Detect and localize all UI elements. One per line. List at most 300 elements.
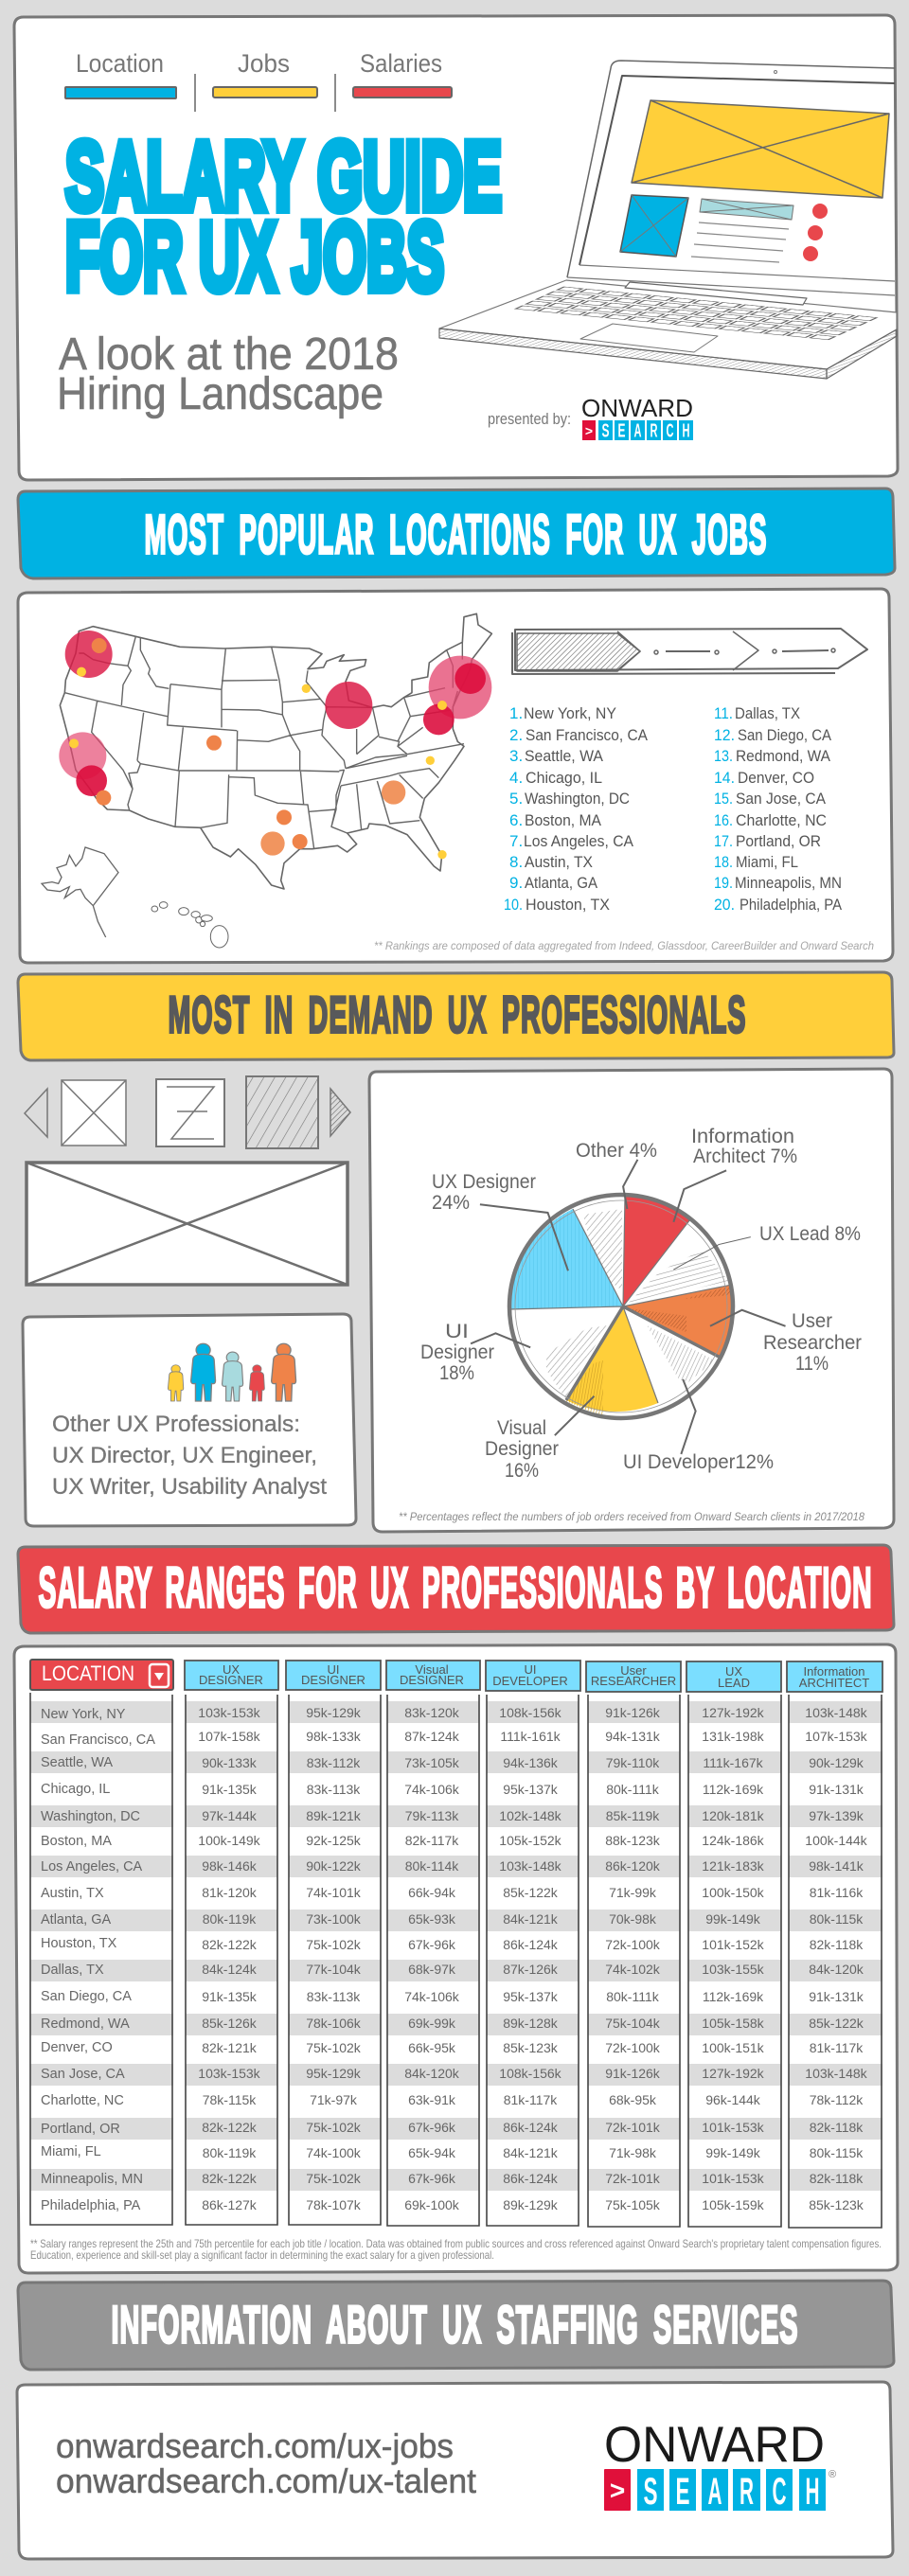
ranking names: Washington, DC [525, 790, 630, 808]
logo: onward search [604, 2417, 836, 2513]
table salary values: 66k-94k [408, 1885, 456, 1900]
table salary values: 101k-153k [702, 2120, 765, 2135]
table salary values: 98k-141k [809, 1858, 864, 1874]
table salary values: 91k-135k [202, 1782, 258, 1797]
ranking names: Redmond, WA [736, 747, 831, 765]
table salary values: 80k-115k [810, 1911, 864, 1927]
table salary values: 91k-135k [202, 1989, 258, 2004]
table location names: Houston, TX [41, 1936, 117, 1951]
legend: salaries: Salaries [360, 49, 442, 78]
header: job titles: DESIGNER [301, 1673, 365, 1687]
table salary values [198, 1705, 868, 2212]
wireframe: large image placeholder [27, 1163, 348, 1285]
table salary values: 83k-120k [404, 1705, 460, 1720]
table salary values: 79k-113k [405, 1808, 459, 1823]
table salary values: 72k-101k [605, 2171, 661, 2186]
table salary values: 91k-126k [605, 2066, 661, 2081]
table salary values: 67k-96k [408, 2120, 456, 2135]
panel: map and rankings [18, 589, 893, 963]
table salary values: 68k-95k [609, 2092, 657, 2107]
table salary values: 98k-133k [306, 1729, 362, 1744]
table salary values: 91k-126k [605, 1705, 661, 1720]
ranking numbers: 1. [509, 704, 523, 722]
pie labels: Information [691, 1126, 794, 1147]
wireframe box: x [62, 1080, 126, 1146]
table salary values: 80k-111k [606, 1989, 660, 2004]
ranking names: New York, NY [524, 704, 616, 722]
table salary values: 89k-129k [503, 2197, 559, 2212]
table salary values: 100k-144k [805, 1833, 868, 1848]
logo: onward search: > [610, 2476, 625, 2505]
table salary values: 86k-124k [503, 1937, 559, 1952]
table salary values: 65k-94k [408, 2145, 456, 2160]
table salary values: 91k-131k [809, 1782, 864, 1797]
ranking numbers: 9. [509, 874, 523, 892]
header: job titles: DESIGNER [400, 1673, 464, 1687]
table salary values: 102k-148k [499, 1808, 562, 1823]
map: hawaii [152, 902, 228, 948]
ranking numbers: 3. [509, 747, 523, 765]
screen: yellow block [632, 100, 889, 198]
logo: onward search: A [708, 2471, 722, 2513]
table salary values: 85k-123k [809, 2197, 864, 2212]
table salary values: 82k-122k [202, 2120, 258, 2135]
table salary values: 65k-93k [408, 1911, 456, 1927]
ranking names: Minneapolis, MN [735, 874, 842, 892]
table salary values: 74k-106k [404, 1782, 460, 1797]
header: job titles: ARCHITECT [799, 1676, 869, 1690]
table salary values: 112k-169k [703, 1989, 764, 2004]
table salary values: 84k-124k [202, 1962, 258, 1977]
pie labels [420, 1126, 862, 1482]
section band: staffing services [18, 2281, 894, 2370]
header: job titles: LEAD [718, 1676, 750, 1690]
table salary values: 107k-153k [805, 1729, 868, 1744]
table location names: Seattle, WA [41, 1755, 113, 1770]
table salary values: 78k-107k [306, 2197, 362, 2212]
table salary values: 80k-111k [606, 1782, 660, 1797]
table salary values: 101k-153k [702, 2171, 765, 2186]
table column outlines [30, 1693, 882, 2228]
text block: UX Writer, Usability Analyst [52, 1474, 327, 1500]
ranking names: Los Angeles, CA [524, 832, 634, 850]
table location names: Boston, MA [41, 1834, 112, 1849]
slice: visual designer [566, 1306, 658, 1412]
map: markers [59, 631, 491, 859]
table salary values: 124k-186k [702, 1833, 765, 1848]
table salary values: 103k-148k [499, 1858, 562, 1874]
logo: onward search: H [805, 2471, 820, 2513]
table salary values: 83k-113k [307, 1989, 361, 2004]
table salary values: 103k-153k [198, 1705, 261, 1720]
logo: small: H [682, 420, 689, 441]
table salary values: 89k-128k [503, 2016, 559, 2031]
ranking names: Philadelphia, PA [740, 896, 843, 914]
pie footnote: ** Percentages reflect the numbers of job orders received from Onward Search clients in 2017/2018 [399, 1510, 864, 1523]
table salary values: 84k-121k [503, 2145, 559, 2160]
ranking numbers: 19. [714, 874, 733, 892]
legend: jobs [213, 49, 317, 98]
table salary values: 105k-152k [499, 1833, 562, 1848]
panel: salary table [14, 1644, 898, 2273]
table footnote [30, 2237, 882, 2262]
table salary values: 79k-110k [606, 1755, 660, 1770]
panel: hero [14, 15, 898, 480]
table salary values: 75k-102k [306, 1937, 362, 1952]
pie labels: 24% [432, 1192, 470, 1214]
table salary values: 80k-119k [203, 2145, 257, 2160]
table salary values: 75k-104k [605, 2016, 661, 2031]
table salary values: 74k-106k [404, 1989, 460, 2004]
table salary values: 95k-137k [503, 1782, 559, 1797]
table salary values: 78k-106k [306, 2016, 362, 2031]
table salary values: 92k-125k [306, 1833, 362, 1848]
table salary values: 71k-97k [310, 2092, 358, 2107]
table salary values: 85k-122k [503, 1885, 559, 1900]
table salary values: 75k-102k [306, 2171, 362, 2186]
table location names: Washington, DC [41, 1809, 140, 1824]
ranking numbers: 2. [509, 726, 523, 744]
slice dividers [509, 1196, 732, 1403]
ranking names: Atlanta, GA [525, 874, 598, 892]
table location names: San Jose, CA [41, 2067, 125, 2082]
table salary values: 111k-167k [703, 1755, 764, 1770]
header: job titles [185, 1661, 882, 1692]
ranking names: San Diego, CA [738, 726, 832, 744]
table salary values: 107k-158k [198, 1729, 261, 1744]
table salary values: 112k-169k [703, 1782, 764, 1797]
logo: onward search: E [676, 2471, 689, 2513]
table salary values: 98k-146k [202, 1858, 258, 1874]
pie chart [509, 1195, 733, 1418]
table salary values: 69k-100k [404, 2197, 460, 2212]
panel: links and logo [17, 2382, 893, 2559]
table salary values: 101k-152k [702, 1937, 765, 1952]
table salary values: 83k-113k [307, 1782, 361, 1797]
pie labels: Other 4% [576, 1140, 657, 1162]
table location names: Chicago, IL [41, 1782, 110, 1797]
icon: people [168, 1343, 296, 1401]
panel: other professionals [23, 1314, 356, 1526]
logo: onward search: R [740, 2471, 754, 2513]
table salary values: 82k-118k [810, 2120, 864, 2135]
ranking numbers: 7. [509, 832, 523, 850]
table location names: San Diego, CA [41, 1989, 132, 2004]
pie labels: UX Lead 8% [759, 1223, 861, 1245]
pie labels: UI [445, 1321, 469, 1342]
arrow: right [330, 1089, 350, 1136]
laptop base [439, 280, 897, 379]
table salary values: 99k-149k [705, 2145, 761, 2160]
pie labels: Architect 7% [693, 1146, 797, 1167]
table salary values: 90k-129k [809, 1755, 864, 1770]
table salary values: 105k-159k [702, 2197, 765, 2212]
table location names: New York, NY [41, 1707, 126, 1722]
table location names: San Francisco, CA [41, 1732, 155, 1748]
ranking numbers: 20. [714, 896, 735, 914]
table salary values: 80k-114k [405, 1858, 459, 1874]
logo: onward search: ONWARD [604, 2417, 825, 2473]
subtitle: Hiring Landscape [57, 369, 383, 419]
text block [52, 1412, 327, 1500]
table salary values: 103k-153k [198, 2066, 261, 2081]
table location names: Redmond, WA [41, 2016, 130, 2032]
logo: small [581, 394, 693, 441]
logo: small: S [602, 420, 610, 441]
ranking names: Boston, MA [525, 811, 602, 829]
table salary values: 73k-100k [306, 1911, 362, 1927]
table salary values: 84k-120k [404, 2066, 460, 2081]
screen: teal block [700, 199, 793, 220]
ranking numbers: 16. [714, 811, 733, 829]
table salary values: 72k-100k [605, 2040, 661, 2055]
ranking names: Denver, CO [738, 769, 814, 787]
map: united states [42, 613, 491, 948]
title: SALARY GUIDE [65, 122, 502, 230]
ranking numbers [504, 704, 735, 914]
table salary values: 103k-148k [805, 2066, 868, 2081]
leader lines [471, 1160, 786, 1454]
pie labels: 11% [795, 1353, 829, 1375]
table salary values: 85k-122k [809, 2016, 864, 2031]
logo: small: C [667, 420, 674, 441]
ranking numbers: 13. [714, 747, 733, 765]
title [65, 122, 502, 311]
header: location [30, 1660, 173, 1690]
table location names: Dallas, TX [41, 1963, 104, 1978]
table location names: Denver, CO [41, 2040, 113, 2055]
slice hatching [546, 1209, 729, 1398]
pie labels: 18% [439, 1362, 474, 1384]
table salary values: 67k-96k [408, 2171, 456, 2186]
ranking names [524, 704, 843, 914]
header: job titles: UX [725, 1664, 742, 1679]
ranking names: Chicago, IL [526, 769, 602, 787]
ranking names: Houston, TX [526, 896, 610, 914]
header: location: LOCATION [42, 1661, 134, 1685]
table location names: Charlotte, NC [41, 2093, 124, 2108]
table salary values: 80k-119k [203, 1911, 257, 1927]
table location names: Miami, FL [41, 2144, 101, 2159]
pie labels: Designer [485, 1438, 559, 1460]
header: job titles: User [620, 1663, 647, 1678]
table salary values: 87k-126k [503, 1962, 559, 1977]
table salary values: 87k-124k [404, 1729, 460, 1744]
ranking numbers: 17. [714, 832, 733, 850]
table salary values: 63k-91k [408, 2092, 456, 2107]
table salary values: 67k-96k [408, 1937, 456, 1952]
ranking numbers: 5. [509, 790, 523, 808]
ranking names: San Jose, CA [736, 790, 827, 808]
ranking numbers: 14. [714, 769, 735, 787]
wireframe box: hatched [246, 1076, 318, 1148]
table salary values: 95k-129k [306, 2066, 362, 2081]
ranking names: San Francisco, CA [526, 726, 649, 744]
ranking names: Charlotte, NC [736, 811, 827, 829]
ranking numbers: 12. [714, 726, 735, 744]
table salary values: 111k-161k [500, 1729, 561, 1744]
subtitle: A look at the 2018 [59, 329, 399, 380]
ranking numbers: 18. [714, 853, 733, 871]
ranking numbers: 10. [504, 896, 523, 914]
table salary values: 85k-119k [606, 1808, 660, 1823]
table salary values: 72k-101k [605, 2120, 661, 2135]
table salary values: 94k-136k [503, 1755, 559, 1770]
wireframe box: z [156, 1079, 224, 1146]
logo: small: A [634, 420, 642, 441]
table location names: Philadelphia, PA [41, 2198, 141, 2213]
table salary values: 89k-121k [306, 1808, 362, 1823]
legend: salaries [353, 49, 452, 98]
text block: Other UX Professionals: [52, 1412, 300, 1437]
wireframe carousel [25, 1076, 350, 1148]
ranking numbers: 4. [509, 769, 523, 787]
section band: locations [18, 489, 895, 578]
table salary values: 100k-149k [198, 1833, 261, 1848]
table salary values: 70k-98k [609, 1911, 657, 1927]
map footnote: ** Rankings are composed of data aggregated from Indeed, Glassdoor, CareerBuilder and Onward Search [374, 939, 874, 952]
table salary values: 69k-99k [408, 2016, 456, 2031]
table salary values: 121k-183k [702, 1858, 765, 1874]
table salary values: 81k-116k [810, 1885, 864, 1900]
header: job titles: RESEARCHER [591, 1674, 676, 1688]
table salary values: 81k-117k [810, 2040, 864, 2055]
legend: jobs: Jobs [238, 49, 290, 78]
table salary values: 83k-112k [307, 1755, 361, 1770]
slice: ux designer [509, 1209, 623, 1309]
table salary values: 74k-101k [306, 1885, 362, 1900]
ranking names: Seattle, WA [525, 747, 604, 765]
table salary values: 108k-156k [499, 2066, 562, 2081]
table salary values: 77k-104k [306, 1962, 362, 1977]
table salary values: 78k-115k [203, 2092, 257, 2107]
table salary values: 103k-148k [805, 1705, 868, 1720]
ranking names: Dallas, TX [735, 704, 800, 722]
table salary values: 131k-198k [702, 1729, 765, 1744]
legend: location [65, 49, 176, 98]
pie labels: Designer [420, 1341, 494, 1363]
table salary values: 105k-158k [702, 2016, 765, 2031]
table salary values: 86k-124k [503, 2120, 559, 2135]
table salary values: 82k-121k [202, 2040, 258, 2055]
table salary values: 84k-120k [809, 1962, 864, 1977]
ranking numbers: 11. [714, 704, 733, 722]
table salary values: 95k-137k [503, 1989, 559, 2004]
table salary values: 81k-117k [504, 2092, 558, 2107]
map: alaska [42, 847, 118, 937]
presented by: presented by: [488, 410, 571, 428]
table salary values: 97k-144k [202, 1808, 258, 1823]
header: job titles: UX [223, 1662, 240, 1677]
table salary values: 97k-139k [809, 1808, 864, 1823]
table salary values: 74k-100k [306, 2145, 362, 2160]
table salary values: 85k-123k [503, 2040, 559, 2055]
legend: location: Location [76, 49, 164, 78]
table location names: Atlanta, GA [41, 1912, 111, 1928]
pie labels: UI Developer12% [623, 1451, 774, 1473]
header: job titles: UI [525, 1662, 536, 1677]
links [56, 2426, 476, 2500]
rankings list [504, 704, 843, 914]
links: onwardsearch.com/ux-jobs [56, 2426, 454, 2465]
table salary values: 75k-102k [306, 2040, 362, 2055]
table salary values: 120k-181k [702, 1808, 765, 1823]
table salary values: 85k-126k [202, 2016, 258, 2031]
header: job titles: DEVELOPER [492, 1674, 568, 1688]
table salary values: 99k-149k [705, 1911, 761, 1927]
table salary values: 81k-120k [202, 1885, 258, 1900]
progress arrow graphic [512, 629, 867, 674]
icon: laptop [439, 61, 897, 379]
table salary values: 95k-129k [306, 1705, 362, 1720]
table salary values: 71k-99k [609, 1885, 657, 1900]
section band: professionals [18, 972, 894, 1060]
pie labels: Researcher [763, 1332, 862, 1354]
table footnote: Education, experience and skill-set play a significant factor in determining the exact salary for a given professional. [30, 2248, 494, 2262]
table location names: Los Angeles, CA [41, 1859, 143, 1874]
table salary values: 127k-192k [702, 1705, 765, 1720]
logo: small: R [650, 420, 658, 441]
subtitle [57, 329, 399, 419]
table salary values: 78k-112k [810, 2092, 864, 2107]
table salary values: 86k-124k [503, 2171, 559, 2186]
table salary values: 108k-156k [499, 1705, 562, 1720]
pie labels: User [792, 1310, 832, 1332]
table salary values: 74k-102k [605, 1962, 661, 1977]
title: FOR UX JOBS [65, 203, 444, 311]
table location names [41, 1707, 155, 2213]
table salary values: 86k-120k [605, 1858, 661, 1874]
table location names: Portland, OR [41, 2122, 120, 2137]
slice: user researcher [623, 1285, 733, 1357]
header: job titles: Visual [415, 1662, 449, 1677]
table salary values: 82k-118k [810, 2171, 864, 2186]
table salary values: 82k-122k [202, 1937, 258, 1952]
table salary values: 82k-118k [810, 1937, 864, 1952]
table salary values: 80k-115k [810, 2145, 864, 2160]
section band: salary ranges [18, 1545, 894, 1633]
table salary values: 66k-95k [408, 2040, 456, 2055]
table salary values: 71k-98k [609, 2145, 657, 2160]
table salary values: 75k-105k [605, 2197, 661, 2212]
header: job titles: UI [328, 1662, 339, 1677]
table salary values: 100k-151k [702, 2040, 765, 2055]
slice: information architect [623, 1196, 690, 1306]
ranking names: Portland, OR [736, 832, 821, 850]
table location names: Minneapolis, MN [41, 2172, 143, 2187]
pie labels: Visual [497, 1417, 546, 1439]
ranking numbers: 15. [714, 790, 733, 808]
table salary values: 103k-155k [702, 1962, 765, 1977]
table salary values: 82k-117k [405, 1833, 459, 1848]
logo: onward search: ® [829, 2469, 836, 2480]
table salary values: 90k-133k [202, 1755, 258, 1770]
ranking numbers: 6. [509, 811, 523, 829]
table salary values: 75k-102k [306, 2120, 362, 2135]
screen: dots [803, 204, 828, 261]
panel: pie chart [369, 1069, 894, 1532]
text block: UX Director, UX Engineer, [52, 1443, 317, 1468]
logo: onward search: S [644, 2471, 657, 2513]
table salary values: 84k-121k [503, 1911, 559, 1927]
logo: small: E [617, 420, 625, 441]
links: onwardsearch.com/ux-talent [56, 2461, 476, 2500]
table salary values: 96k-144k [705, 2092, 761, 2107]
pie labels: UX Designer [432, 1171, 536, 1193]
table salary values: 88k-123k [605, 1833, 661, 1848]
table salary values: 68k-97k [408, 1962, 456, 1977]
table salary values: 73k-105k [404, 1755, 460, 1770]
